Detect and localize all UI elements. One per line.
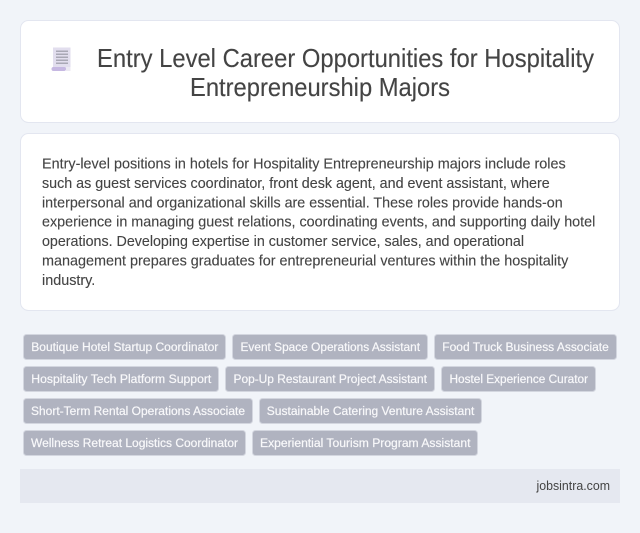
tag: Short-Term Rental Operations Associate [31,404,245,418]
title [97,45,594,102]
tag: Experiential Tourism Program Assistant [260,436,471,450]
text block: description [42,156,595,289]
tag [24,366,218,392]
footer source text: jobsintra.com [536,478,610,493]
tag [232,334,428,360]
footer bar [20,469,620,503]
panel: description card [20,134,620,310]
text block: description: industry. [42,273,95,289]
text block: description: interpersonal and organizational skills are essential. These roles provide hands-on [42,195,563,211]
text block: description: management prepares graduates for entrepreneurial ventures within the hospitality [42,254,569,270]
tag [434,334,616,360]
tag [252,430,478,456]
tag: Pop-Up Restaurant Project Assistant [234,372,428,386]
tag: Wellness Retreat Logistics Coordinator [31,436,238,450]
tag list: career roles [24,334,616,456]
tag: Hospitality Tech Platform Support [31,372,212,386]
tag: Boutique Hotel Startup Coordinator [31,340,218,354]
title: Entrepreneurship Majors [190,74,450,102]
tag [260,398,482,424]
text block: description: Entry-level positions in hotels for Hospitality Entrepreneurship majors include roles [42,156,566,172]
tag: Sustainable Catering Venture Assistant [267,404,475,418]
tag [442,366,596,392]
tag [24,430,246,456]
tag: Event Space Operations Assistant [240,340,421,354]
icon: document scroll [52,48,70,71]
panel: header card [20,20,620,122]
tag: Food Truck Business Associate [442,340,609,354]
tag [24,398,252,424]
text block: description: experience in managing guest relations, coordinating events, and supporting daily hotel [42,215,595,231]
text block: description: such as guest services coordinator, front desk agent, and event assistant, where [42,176,550,192]
title: Entry Level Career Opportunities for Hospitality [97,45,594,73]
tag: Hostel Experience Curator [450,372,588,386]
tag [226,366,434,392]
text block: description: operations. Developing expertise in customer service, sales, and operational [42,234,524,250]
tag [24,334,226,360]
